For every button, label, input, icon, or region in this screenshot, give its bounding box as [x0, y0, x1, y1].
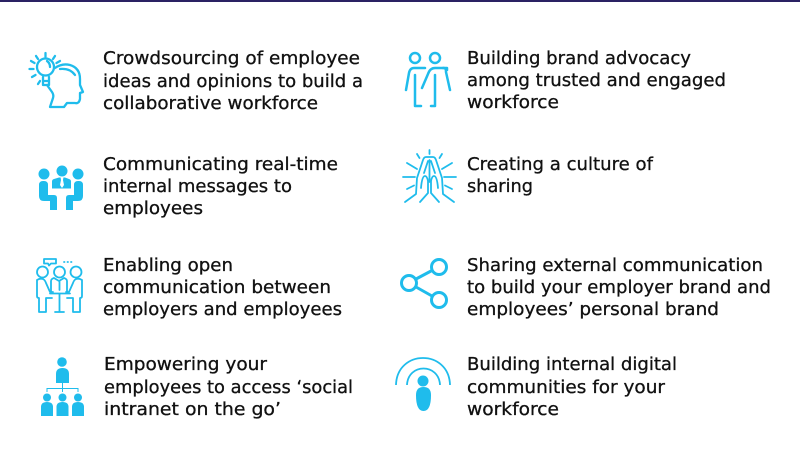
icon: three people at a meeting — [38, 166, 84, 210]
panel: external communication — [402, 256, 771, 320]
panel: real-time messages — [38, 155, 338, 219]
icon: organisation hierarchy — [41, 357, 84, 416]
text: open communication: Enabling open — [103, 256, 233, 276]
text: digital communities: workforce — [467, 400, 559, 420]
text: external communication: employees’ personal brand — [467, 300, 719, 320]
panel: social intranet — [41, 355, 353, 420]
icon: person with broadcast arcs — [396, 358, 450, 411]
text: real-time messages: employees — [103, 199, 203, 219]
text: social intranet: Empowering your — [104, 355, 268, 375]
text: brand advocacy — [467, 49, 726, 113]
text: crowdsourcing: Crowdsourcing of employee — [103, 49, 360, 69]
text: brand advocacy: among trusted and engaged — [467, 71, 726, 91]
text: real-time messages: Communicating real-time — [103, 155, 338, 175]
text: digital communities — [467, 355, 677, 420]
text: external communication: to build your employer brand and — [467, 278, 771, 298]
text: real-time messages — [103, 155, 338, 219]
panel: crowdsourcing — [30, 49, 363, 114]
icon: meeting table outline — [37, 259, 82, 312]
text: open communication: employers and employees — [103, 300, 342, 320]
text: social intranet: intranet on the go’ — [104, 400, 281, 420]
text: culture of sharing — [467, 155, 654, 197]
text: open communication — [103, 256, 342, 320]
panel: brand advocacy — [406, 49, 726, 113]
text: social intranet: employees to access ‘social — [104, 378, 353, 398]
icon: two people with arm on shoulder — [406, 53, 450, 106]
panel: digital communities — [396, 355, 677, 420]
panel: culture of sharing — [403, 150, 654, 202]
text: digital communities: communities for your — [467, 378, 666, 398]
text: brand advocacy: workforce — [467, 93, 559, 113]
text: brand advocacy: Building brand advocacy — [467, 49, 691, 69]
top bar — [0, 0, 800, 2]
icon: share nodes — [402, 260, 446, 308]
text: culture of sharing: sharing — [467, 177, 533, 197]
text: external communication — [467, 256, 771, 320]
text: crowdsourcing: ideas and opinions to build a — [103, 72, 363, 92]
text: social intranet — [104, 355, 353, 420]
icon: praying hands with rays — [403, 150, 456, 202]
text: real-time messages: internal messages to — [103, 177, 292, 197]
panel: open communication — [37, 256, 342, 320]
icon: head with light bulb — [30, 53, 83, 107]
text: crowdsourcing: collaborative workforce — [103, 94, 318, 114]
text: open communication: communication between — [103, 278, 331, 298]
text: culture of sharing: Creating a culture of — [467, 155, 654, 175]
text: digital communities: Building internal digital — [467, 355, 677, 375]
text: crowdsourcing — [103, 49, 363, 114]
text: external communication: Sharing external communication — [467, 256, 763, 276]
